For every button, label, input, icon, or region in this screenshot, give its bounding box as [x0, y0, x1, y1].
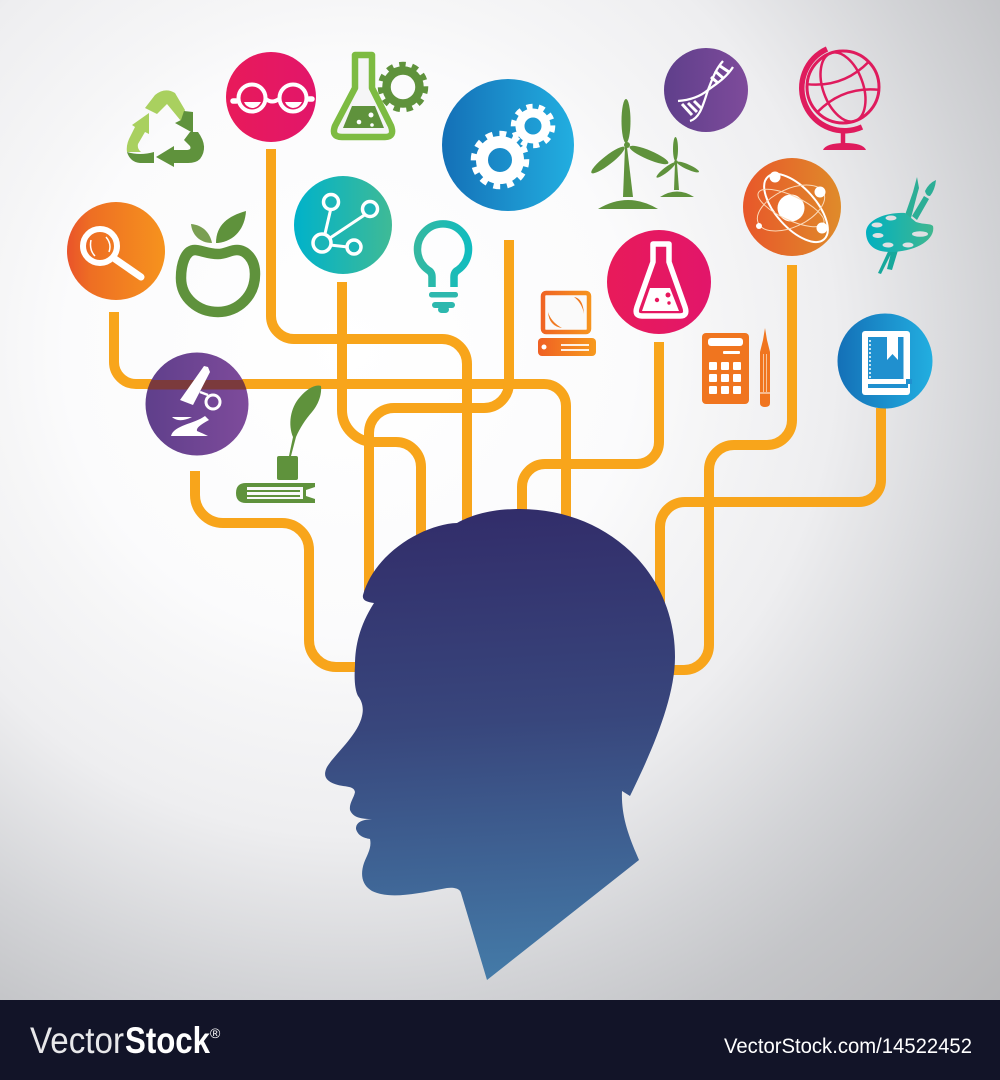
icon: gears circle — [442, 79, 574, 211]
icon: artist palette and brushes — [866, 177, 936, 274]
footer logo: Vector — [30, 1020, 124, 1061]
icon: glasses circle — [226, 52, 316, 142]
icon: light bulb — [418, 224, 469, 313]
footer logo: Stock — [125, 1020, 210, 1061]
icon: magnifier circle — [67, 202, 165, 300]
icon: apple — [181, 211, 255, 312]
icon: microscope circle — [146, 352, 248, 456]
icon: wind turbines — [589, 99, 700, 209]
footer bar — [0, 1000, 1000, 1080]
icon: network circle — [294, 176, 392, 274]
footer image id: VectorStock.com/14522452 — [724, 1035, 972, 1058]
connector pipes — [114, 149, 881, 670]
icon: quill and inkwell on book — [236, 386, 321, 503]
icon: atom circle — [743, 158, 841, 256]
icon: computer — [538, 293, 596, 356]
footer logo: ® — [210, 1025, 221, 1041]
icon: pink flask circle — [607, 230, 711, 334]
icon: globe — [800, 42, 886, 150]
icon: calculator — [702, 333, 749, 404]
icon: recycle — [127, 90, 204, 167]
footer logo — [30, 1020, 221, 1061]
icon: DNA circle — [664, 48, 748, 132]
icon: book circle — [838, 314, 932, 408]
icon: pencil — [760, 328, 770, 407]
head silhouette — [325, 509, 675, 980]
icon: green flask with gear — [334, 55, 426, 137]
